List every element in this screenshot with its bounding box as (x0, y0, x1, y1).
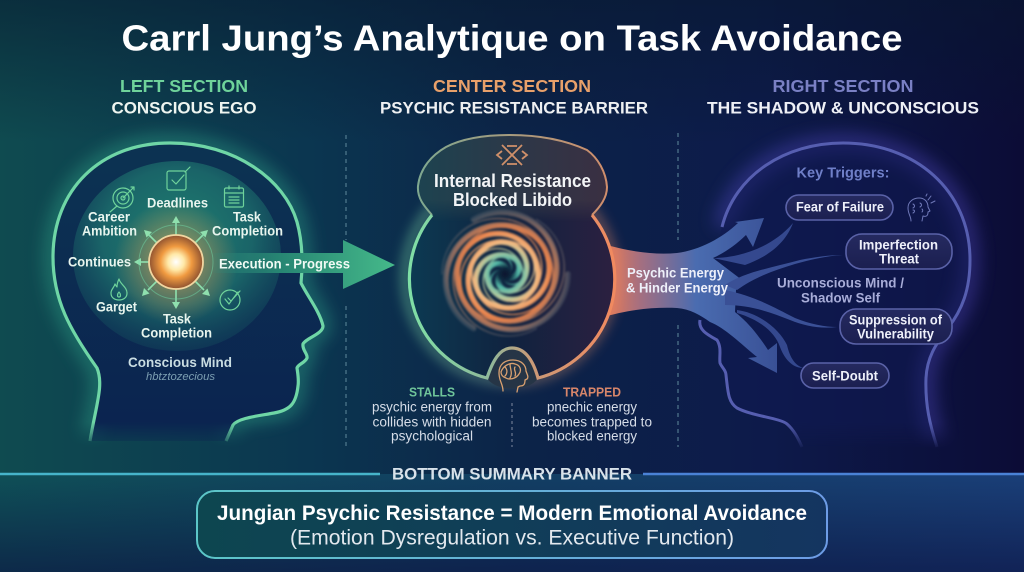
label: conscious mind: hbtztozecious (146, 371, 216, 383)
icon: blocked symbol (497, 145, 527, 165)
head silhouette (53, 143, 323, 441)
icon: target (110, 187, 134, 212)
labels: conscious drivers: Continues (68, 254, 131, 270)
text: trapped: blocked energy (547, 428, 637, 444)
text: trapped: becomes trapped to (532, 414, 652, 430)
barrier glow (406, 173, 614, 381)
label: unconscious mind (777, 276, 904, 306)
banner rule (0, 473, 1024, 475)
heading: right section: THE SHADOW & UNCONSCIOUS (707, 98, 979, 118)
panel: left head (53, 143, 395, 441)
arrow: execution progress (213, 240, 395, 289)
conscious mind circle (73, 161, 281, 351)
barrier fill (409, 135, 615, 378)
label: unconscious mind: Unconscious Mind / (777, 276, 904, 290)
pill: suppression of vulnerability: Vulnerability (857, 326, 934, 342)
heading: center section: PSYCHIC RESISTANCE BARRIER (380, 98, 648, 118)
panel: right head (700, 143, 970, 447)
text: stalls (372, 384, 492, 444)
head silhouette (724, 144, 968, 426)
labels: conscious drivers: Completion (212, 224, 283, 238)
label: conscious mind: Conscious Mind (128, 354, 232, 370)
heading: center section (380, 76, 648, 118)
top lobe fill (419, 136, 606, 215)
heading: left section (112, 76, 256, 118)
arrow: execution progress: Execution - Progress (219, 256, 350, 272)
section dividers (346, 133, 678, 447)
pill: suppression of vulnerability: Suppression of (849, 312, 942, 328)
icon: calendar (224, 186, 244, 207)
label: psychic energy: & Hinder Energy (626, 280, 728, 296)
barrier title: Internal Resistance (434, 171, 591, 191)
pill: self-doubt: Self-Doubt (812, 368, 878, 384)
text: stalls: collides with hidden (372, 414, 492, 430)
text: stalls: psychological (391, 428, 473, 444)
arch fill (487, 348, 538, 388)
panel: bottom banner (0, 464, 1024, 572)
pill: fear of failure: Fear of Failure (796, 200, 884, 214)
pill: self-doubt (801, 363, 889, 388)
head outline (53, 143, 323, 441)
divider (511, 403, 513, 447)
energy stream (600, 218, 843, 373)
pill: suppression of vulnerability (840, 309, 952, 344)
barrier title (434, 171, 591, 210)
labels: conscious drivers: Completion (141, 326, 212, 340)
title: Carrl Jung’s Analytique on Task Avoidance (122, 18, 903, 58)
icon: anxious head (908, 194, 935, 221)
wisp: fear (713, 223, 793, 265)
top lobe outline (418, 135, 607, 215)
labels: conscious drivers: Ambition (82, 224, 137, 238)
pill: fear of failure (786, 195, 893, 220)
wisp: self-doubt (737, 310, 803, 368)
icon: brain head (499, 360, 528, 392)
icon: checkbox (167, 167, 190, 190)
heading: left section: LEFT SECTION (120, 76, 248, 96)
text: stalls: psychic energy from (372, 400, 492, 414)
wisp: suppression (725, 290, 837, 328)
radial arrows (134, 216, 210, 309)
labels: conscious drivers: Garget (96, 300, 137, 314)
main stream with arrows (600, 218, 777, 373)
core glow (114, 200, 238, 324)
face outline (700, 320, 802, 447)
label: conscious mind (128, 354, 232, 383)
head outline (722, 143, 970, 447)
pill: imperfection threat: Threat (879, 252, 919, 266)
labels: conscious drivers: Task (163, 312, 191, 326)
summary box (197, 491, 827, 558)
labels: conscious drivers: Task (233, 210, 261, 224)
labels: conscious drivers: Deadlines (147, 196, 208, 210)
summary box: Jungian Psychic Resistance = Modern Emotional Avoidance (217, 501, 807, 525)
text: trapped: pnechic energy (547, 400, 637, 414)
heading: left section: CONSCIOUS EGO (112, 98, 256, 118)
banner label: BOTTOM SUMMARY BANNER (392, 464, 632, 484)
head glow (722, 143, 970, 447)
heading: right section: RIGHT SECTION (772, 76, 914, 96)
panel: center barrier (406, 135, 615, 392)
barrier title: Blocked Libido (453, 190, 572, 210)
pill: imperfection threat: Imperfection (859, 238, 938, 252)
swirl (425, 192, 585, 356)
heading: right section (707, 76, 979, 118)
label: key triggers: Key Triggers: (796, 164, 890, 182)
label: unconscious mind: Shadow Self (801, 290, 880, 306)
summary box: (Emotion Dysregulation vs. Executive Function) (290, 526, 734, 550)
head glow (53, 143, 323, 441)
heading: center section: CENTER SECTION (433, 76, 591, 96)
text: stalls: STALLS (409, 384, 455, 400)
labels: conscious drivers (68, 196, 283, 340)
barrier ring outline (409, 215, 615, 378)
core sun (139, 225, 213, 299)
icon: check circle (220, 290, 240, 310)
label: psychic energy: Psychic Energy (627, 266, 724, 280)
label: psychic energy (626, 266, 728, 296)
wisp: imperfection (725, 255, 843, 290)
labels: conscious drivers: Career (88, 210, 131, 224)
text: trapped: TRAPPED (563, 384, 621, 400)
pill: imperfection threat (846, 234, 952, 269)
text: trapped (532, 384, 652, 444)
icon: flame (111, 279, 127, 300)
